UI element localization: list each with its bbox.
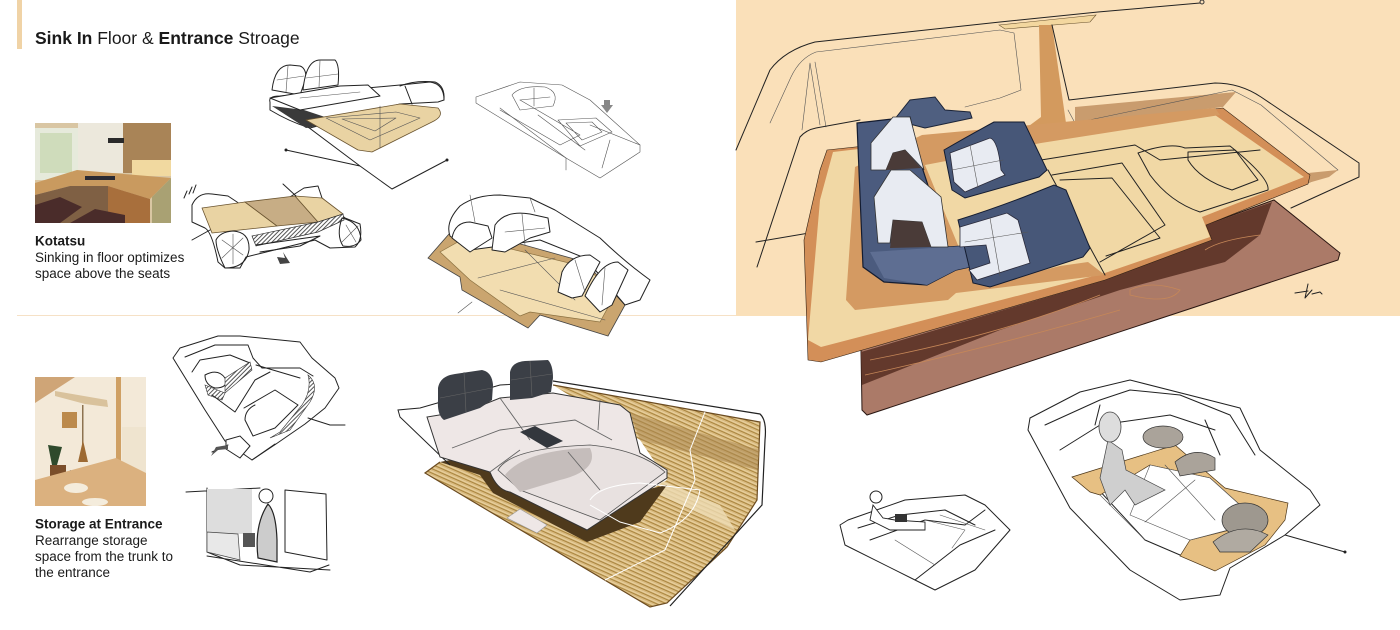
illustration: white seat and wood panel	[398, 360, 765, 607]
sketch: seats with sunken floor	[270, 60, 448, 189]
sketch: top view of cabin with seated figures	[1028, 380, 1346, 600]
sketch: storage floor plan	[173, 336, 345, 460]
sketch: reclining person on seat	[840, 491, 1010, 590]
text block: Storage at Entrance: space from the trunk to	[35, 549, 173, 564]
illustration: main cabin floor with navy seats	[736, 0, 1359, 415]
peach background panel	[736, 0, 1400, 316]
text block: Kotatsu: space above the seats	[35, 266, 170, 281]
photo: kotatsu room	[35, 123, 171, 223]
navy L seat	[857, 117, 990, 285]
seat body	[427, 393, 667, 530]
sketch: chassis with cream floor	[184, 184, 361, 268]
wooden lower tray	[861, 200, 1340, 415]
white overlay lines	[590, 412, 705, 580]
sketch: person at entrance	[186, 488, 330, 572]
title accent bar	[17, 0, 22, 49]
navy seat 2	[958, 185, 1090, 287]
cream floor	[808, 115, 1304, 347]
headrests	[438, 370, 493, 420]
orange floor edge	[804, 108, 1310, 362]
orange band and patch around seats	[846, 108, 1220, 310]
wood shell	[425, 385, 760, 607]
white back cushion 2	[874, 170, 948, 247]
text block: Kotatsu: Sinking in floor optimizes	[35, 250, 185, 265]
text block: Storage at Entrance: the entrance	[35, 565, 110, 580]
section divider	[17, 315, 736, 316]
table	[520, 426, 563, 448]
title: Sink In Floor & Entrance Stroage	[35, 28, 300, 48]
sketch: cream floor with white seats	[428, 195, 650, 336]
white back cushion 1	[871, 117, 924, 170]
navy seat 1	[944, 122, 1047, 198]
pad	[507, 509, 547, 533]
text block: Storage at Entrance: Rearrange storage	[35, 533, 148, 548]
pillar and window frames	[999, 15, 1096, 29]
headrest	[894, 97, 972, 128]
right cream detail	[1041, 145, 1260, 275]
photo: entrance storage	[35, 377, 146, 506]
text block: Kotatsu: Kotatsu	[35, 234, 85, 248]
sketch: stowed seat outline	[476, 82, 640, 178]
car body lines	[736, 3, 1200, 150]
text block: Storage at Entrance: Storage at Entrance	[35, 516, 163, 532]
shell outline	[553, 381, 765, 606]
signature	[1295, 284, 1322, 298]
